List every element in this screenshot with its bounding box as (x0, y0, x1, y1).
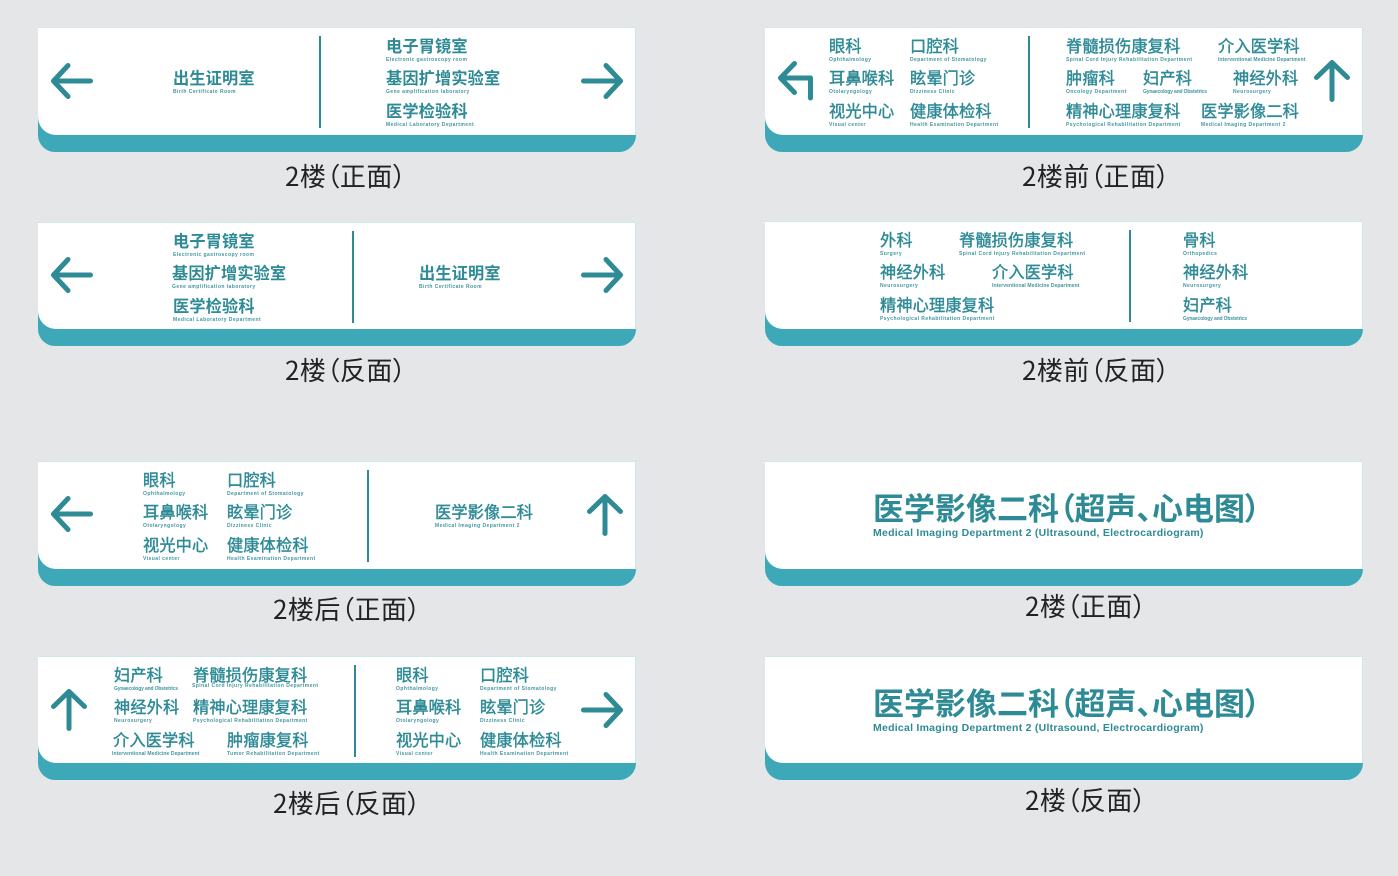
department: 眼科: 眼科 (396, 667, 429, 685)
department: 医学影像二科: 医学影像二科 (1201, 103, 1299, 121)
department: 脊髓损伤康复科: 脊髓损伤康复科 (193, 667, 307, 685)
icon: turn-left arrow (778, 61, 813, 100)
department: 介入医学科: Interventional Medicine Department (992, 282, 1079, 288)
department: 健康体检科 (480, 732, 569, 759)
department: 妇产科: Gynaecology and Obstetrics (1143, 88, 1207, 94)
divider (1129, 230, 1131, 322)
caption: 2楼正面: 2楼（正面） (285, 157, 406, 194)
icon: right arrow (581, 257, 624, 293)
caption: 2楼反面: 2楼（反面） (285, 351, 406, 388)
department: 眩晕门诊: 眩晕门诊 (227, 504, 292, 522)
caption: 2楼正面: 2楼（正面） (1025, 587, 1146, 624)
department: 基因扩增实验室: Gene amplification laboratory (172, 284, 256, 290)
divider (367, 470, 369, 562)
department: 脊髓损伤康复科: 脊髓损伤康复科 (1066, 38, 1180, 56)
department: 肿瘤科: 肿瘤科 (1066, 70, 1115, 88)
department: 精神心理康复科: 精神心理康复科 (880, 297, 994, 315)
department: 精神心理康复科: 精神心理康复科 (1066, 103, 1180, 121)
department: 出生证明室: 出生证明室 (173, 70, 255, 88)
department: 介入医学科 (992, 264, 1080, 288)
department: 外科: Surgery (880, 250, 902, 256)
department: 眼科 (829, 38, 872, 62)
department: 眼科: Ophthalmology (396, 686, 439, 692)
department: 健康体检科: 健康体检科 (480, 732, 562, 750)
department: 介入医学科: Interventional Medicine Department (112, 750, 199, 756)
icon: left arrow (50, 257, 93, 293)
department: 电子胃镜室: Electronic gastroscopy room (173, 252, 254, 258)
caption: 2楼前反面: 2楼前（反面） (1022, 351, 1170, 388)
department: 眼科: 眼科 (143, 472, 176, 490)
department: 口腔科 (227, 472, 304, 496)
department: 精神心理康复科: Psychological Rehabilitation Department (1066, 122, 1181, 128)
department: 医学影像二科: Medical Imaging Department 2 (435, 522, 520, 528)
department: 介入医学科: 介入医学科 (1218, 38, 1300, 56)
department: 医学影像二科: 医学影像二科 (435, 504, 533, 522)
department: 脊髓损伤康复科 (1066, 38, 1192, 62)
department: 妇产科 (1143, 70, 1207, 94)
department: 口腔科: 口腔科 (227, 472, 276, 490)
divider (1028, 36, 1030, 128)
department: 口腔科 (480, 667, 557, 694)
icon: up arrow (1314, 60, 1350, 102)
department: 神经外科: Neurosurgery (880, 282, 918, 288)
department: 视光中心: 视光中心 (396, 732, 461, 750)
department: 脊髓损伤康复科 (193, 667, 318, 694)
department: 神经外科: 神经外科 (1183, 264, 1248, 282)
department: 口腔科: Department of Stomatology (910, 56, 987, 62)
department: 眩晕门诊: Dizziness Clinic (227, 522, 272, 528)
department: 健康体检科: Health Examination Department (227, 556, 316, 562)
department: 脊髓损伤康复科 (959, 232, 1085, 256)
icon: up arrow (38, 461, 636, 569)
panel: 2楼后反面 sign (38, 656, 636, 780)
panel: 2楼前正面 sign (765, 27, 1363, 152)
department: 妇产科: Gynaecology and Obstetrics (1183, 316, 1247, 322)
department: 耳鼻喉科: 耳鼻喉科 (396, 699, 461, 717)
department: 妇产科: 妇产科 (114, 667, 163, 685)
panel: 2楼反面 sign (38, 222, 636, 346)
department: 眼科: Ophthalmology (143, 490, 186, 496)
department: 耳鼻喉科: Otolaryngology (829, 88, 872, 94)
department: 电子胃镜室: Electronic gastroscopy room (386, 56, 467, 62)
department: 眩晕门诊: Dizziness Clinic (480, 718, 525, 724)
caption: 2楼后反面: 2楼后（反面） (273, 784, 421, 821)
department: 健康体检科: 健康体检科 (910, 103, 992, 121)
icon: right arrow (38, 656, 636, 764)
caption: 2楼前正面: 2楼前（正面） (1022, 157, 1170, 194)
department: 医学影像二科: Medical Imaging Department 2 (1201, 122, 1286, 128)
department: 肿瘤科: Oncology Department (1066, 88, 1127, 94)
department: 医学检验科: Medical Laboratory Department (386, 122, 474, 128)
department: 妇产科 (114, 667, 178, 694)
department: 出生证明室: 出生证明室 (419, 265, 501, 283)
department: 肿瘤康复科 (227, 732, 320, 759)
department: 精神心理康复科: Psychological Rehabilitation Department (193, 718, 308, 724)
icon: left arrow (50, 496, 93, 532)
panel: 2楼反面 large sign (765, 656, 1363, 780)
department: 眼科 (396, 667, 439, 694)
department: 口腔科: Department of Stomatology (480, 686, 557, 692)
department: 神经外科: Neurosurgery (114, 718, 152, 724)
department: 健康体检科 (227, 537, 316, 564)
icon: left arrow (50, 63, 93, 99)
department: 脊髓损伤康复科: Spinal Cord Injury Rehabilitation Department (192, 682, 318, 688)
department: 妇产科: 妇产科 (1143, 70, 1192, 88)
department title: Medical Imaging Department 2 (Ultrasound, Electrocardiogram) (873, 526, 1204, 538)
department: 眩晕门诊: 眩晕门诊 (480, 699, 545, 717)
panel: 2楼正面 large sign (765, 461, 1363, 586)
department: 电子胃镜室: 电子胃镜室 (173, 233, 255, 251)
department: 精神心理康复科: Psychological Rehabilitation Department (880, 316, 995, 322)
divider (352, 231, 354, 323)
department: 骨科: Orthopedics (1183, 250, 1217, 256)
department: 眩晕门诊: Dizziness Clinic (910, 88, 955, 94)
department: 基因扩增实验室: 基因扩增实验室 (172, 265, 286, 283)
department: 耳鼻喉科 (396, 699, 461, 726)
department: 耳鼻喉科: 耳鼻喉科 (143, 504, 208, 522)
department: 口腔科: 口腔科 (910, 38, 959, 56)
divider (319, 36, 321, 128)
department: 眼科 (143, 472, 186, 496)
panel: 2楼后正面 sign (38, 461, 636, 586)
department: 介入医学科 (113, 732, 199, 759)
department: 骨科: 骨科 (1183, 232, 1216, 250)
department: 眼科: Ophthalmology (829, 56, 872, 62)
department: 电子胃镜室: 电子胃镜室 (386, 38, 468, 56)
department: 神经外科: Neurosurgery (1233, 88, 1271, 94)
department: 眼科: 眼科 (829, 38, 862, 56)
department: 眩晕门诊 (480, 699, 545, 726)
department: 医学检验科: 医学检验科 (386, 103, 468, 121)
department: 脊髓损伤康复科: Spinal Cord Injury Rehabilitation Department (1066, 56, 1192, 62)
department: 医学检验科: Medical Laboratory Department (173, 316, 261, 322)
department title: 医学影像二科（超声、心电图） (873, 687, 1260, 722)
department: 耳鼻喉科: Otolaryngology (143, 522, 186, 528)
department: 耳鼻喉科: 耳鼻喉科 (829, 70, 894, 88)
caption: 2楼后正面: 2楼后（正面） (273, 590, 421, 627)
department: 骨科 (1183, 232, 1217, 256)
department: 健康体检科 (910, 102, 999, 128)
department: 介入医学科: 介入医学科 (113, 732, 195, 750)
icon: up arrow (38, 656, 636, 764)
department: 医学检验科 (386, 102, 474, 128)
department: 医学影像二科 (435, 504, 533, 531)
department: 口腔科: 口腔科 (480, 667, 529, 685)
icon: right arrow (581, 63, 624, 99)
department: 出生证明室: Birth Certificate Room (419, 284, 482, 290)
department: 精神心理康复科: 精神心理康复科 (193, 699, 307, 717)
department: 口腔科: Department of Stomatology (227, 490, 304, 496)
department: 神经外科: 神经外科 (1233, 70, 1298, 88)
department: 视光中心 (143, 537, 208, 564)
caption: 2楼反面: 2楼（反面） (1025, 781, 1146, 818)
department: 介入医学科 (1218, 38, 1306, 62)
panel: 2楼正面 sign (38, 27, 636, 152)
department: 神经外科 (114, 699, 179, 726)
department: 视光中心 (396, 732, 461, 759)
department: 视光中心: Visual center (829, 122, 866, 128)
department: 出生证明室: Birth Certificate Room (173, 88, 236, 94)
department: 基因扩增实验室: Gene amplification laboratory (386, 88, 470, 94)
department: 肿瘤康复科: 肿瘤康复科 (227, 732, 309, 750)
department: 精神心理康复科 (193, 699, 308, 726)
department: 介入医学科: 介入医学科 (992, 264, 1074, 282)
department: 神经外科: 神经外科 (114, 699, 179, 717)
department: 视光中心: 视光中心 (829, 103, 894, 121)
divider (354, 665, 356, 757)
department: 眩晕门诊: 眩晕门诊 (910, 70, 975, 88)
department: 外科: 外科 (880, 232, 913, 250)
department: 视光中心: Visual center (396, 750, 433, 756)
department: 视光中心: Visual center (143, 556, 180, 562)
department: 耳鼻喉科: Otolaryngology (396, 718, 439, 724)
department: 口腔科 (910, 38, 987, 62)
department: 医学检验科 (173, 298, 261, 322)
department: 介入医学科: Interventional Medicine Department (1218, 56, 1305, 62)
department: 妇产科 (1183, 296, 1247, 322)
department: 基因扩增实验室: 基因扩增实验室 (386, 70, 500, 88)
panel: 2楼前反面 sign (765, 221, 1363, 346)
department: 视光中心: 视光中心 (143, 537, 208, 555)
department: 脊髓损伤康复科: Spinal Cord Injury Rehabilitation Department (959, 250, 1085, 256)
department: 脊髓损伤康复科: 脊髓损伤康复科 (959, 232, 1073, 250)
department: 健康体检科: 健康体检科 (227, 537, 309, 555)
department: 神经外科: 神经外科 (880, 264, 945, 282)
department title: Medical Imaging Department 2 (Ultrasound, Electrocardiogram) (873, 722, 1204, 734)
department: 肿瘤科 (1066, 70, 1127, 94)
department: 妇产科: Gynaecology and Obstetrics (114, 686, 178, 692)
department: 医学检验科: 医学检验科 (173, 298, 255, 316)
department: 健康体检科: Health Examination Department (910, 122, 999, 128)
department: 妇产科: 妇产科 (1183, 297, 1232, 315)
department: 肿瘤康复科: Tumor Rehabilitation Department (227, 750, 320, 756)
department: 神经外科: Neurosurgery (1183, 282, 1221, 288)
department title: 医学影像二科（超声、心电图） (873, 492, 1260, 527)
department: 健康体检科: Health Examination Department (480, 750, 569, 756)
